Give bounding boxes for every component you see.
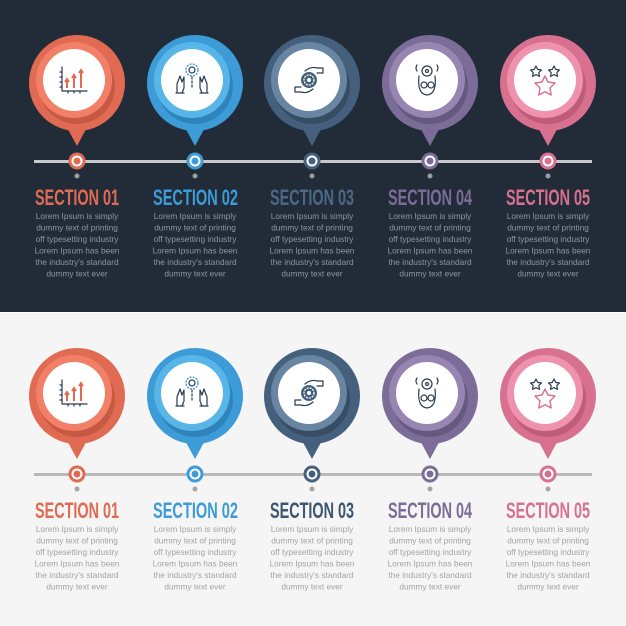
text 4 bottom: Lorem Ipsum has been bbox=[388, 558, 473, 568]
text 3 bottom: Lorem Ipsum has been bbox=[270, 558, 355, 568]
text 2 top: the industry's standard bbox=[153, 257, 237, 267]
text 2 bottom: off typesetting industry bbox=[154, 547, 237, 557]
text 2 top: Lorem Ipsum has been bbox=[153, 246, 238, 256]
text 2 top: Lorem Ipsum is simply bbox=[154, 211, 237, 221]
section 5 bottom bbox=[500, 348, 596, 592]
text 4 bottom: dummy text of printing bbox=[389, 536, 471, 546]
text 3 top: the industry's standard bbox=[270, 257, 354, 267]
text 5 top: Lorem Ipsum is simply bbox=[507, 211, 590, 221]
section 5 top bbox=[500, 35, 596, 278]
section 3 bottom bbox=[264, 348, 360, 592]
marker 2 top bbox=[186, 152, 204, 178]
text 2 top: dummy text of printing bbox=[154, 222, 236, 232]
pin 4 bottom bbox=[382, 348, 478, 459]
heading 1 top: SECTION 01 bbox=[35, 185, 119, 210]
pin 5 bottom bbox=[500, 348, 596, 459]
marker 1 top bbox=[68, 152, 86, 178]
icon: stars bbox=[530, 66, 560, 95]
text 5 top: Lorem Ipsum has been bbox=[506, 246, 591, 256]
marker 2 bottom bbox=[186, 466, 204, 492]
text 5 bottom bbox=[506, 524, 591, 592]
icon: stars bbox=[530, 379, 560, 408]
text 1 bottom: Lorem Ipsum has been bbox=[35, 558, 120, 568]
pin 2 top bbox=[147, 35, 243, 146]
text 1 bottom: the industry's standard bbox=[35, 570, 119, 580]
text 3 top bbox=[270, 211, 355, 278]
icon: hands with gear bbox=[295, 380, 323, 406]
text 4 top: dummy text of printing bbox=[389, 222, 471, 232]
text 1 bottom: off typesetting industry bbox=[36, 547, 119, 557]
text 5 bottom: Lorem Ipsum has been bbox=[506, 558, 591, 568]
text 5 bottom: off typesetting industry bbox=[507, 547, 590, 557]
text 3 top: Lorem Ipsum has been bbox=[270, 246, 355, 256]
text 2 bottom: Lorem Ipsum has been bbox=[153, 558, 238, 568]
text 4 bottom: Lorem Ipsum is simply bbox=[389, 524, 472, 534]
pin 1 top bbox=[29, 35, 125, 146]
text 2 top: off typesetting industry bbox=[154, 234, 237, 244]
text 2 top bbox=[153, 211, 238, 278]
text 4 top: the industry's standard bbox=[388, 257, 472, 267]
text 3 top: off typesetting industry bbox=[271, 234, 354, 244]
text 3 top: Lorem Ipsum is simply bbox=[271, 211, 354, 221]
icon: hands with idea gear bbox=[176, 64, 208, 93]
text 3 bottom: dummy text of printing bbox=[271, 536, 353, 546]
heading 4 top: SECTION 04 bbox=[388, 185, 472, 210]
marker 3 bottom bbox=[304, 466, 320, 492]
icon: bar chart bbox=[60, 67, 87, 93]
text 3 bottom: dummy text ever bbox=[281, 582, 343, 592]
text 1 top: the industry's standard bbox=[35, 257, 119, 267]
section 3 top bbox=[264, 35, 360, 278]
marker 5 bottom bbox=[540, 466, 556, 492]
text 2 bottom: the industry's standard bbox=[153, 570, 237, 580]
text 2 bottom bbox=[153, 524, 238, 592]
icon: hands with gear bbox=[295, 67, 323, 93]
text 4 top: Lorem Ipsum is simply bbox=[389, 211, 472, 221]
text 2 top: dummy text ever bbox=[164, 268, 226, 278]
text 5 top: dummy text of printing bbox=[507, 222, 589, 232]
pin 1 bottom bbox=[29, 348, 125, 459]
text 3 bottom bbox=[270, 524, 355, 592]
text 4 top bbox=[388, 211, 473, 278]
timeline bottom bbox=[34, 473, 592, 476]
text 2 bottom: Lorem Ipsum is simply bbox=[154, 524, 237, 534]
text 5 bottom: dummy text of printing bbox=[507, 536, 589, 546]
timeline top bbox=[34, 160, 592, 163]
text 1 top bbox=[35, 211, 120, 278]
heading 2 bottom: SECTION 02 bbox=[153, 498, 238, 523]
text 4 top: off typesetting industry bbox=[389, 234, 472, 244]
section 4 top bbox=[382, 35, 478, 278]
text 3 top: dummy text of printing bbox=[271, 222, 353, 232]
section 1 bottom bbox=[29, 348, 125, 592]
text 1 top: Lorem Ipsum is simply bbox=[36, 211, 119, 221]
icon: hands with idea gear bbox=[176, 377, 208, 406]
section 2 top bbox=[147, 35, 243, 278]
text 1 bottom bbox=[35, 524, 120, 592]
panel: light bottom bbox=[0, 313, 626, 626]
marker 4 bottom bbox=[422, 466, 438, 492]
text 5 bottom: the industry's standard bbox=[506, 570, 590, 580]
text 4 top: dummy text ever bbox=[399, 268, 461, 278]
text 5 top: off typesetting industry bbox=[507, 234, 590, 244]
section 1 top bbox=[29, 35, 125, 278]
text 3 bottom: the industry's standard bbox=[270, 570, 354, 580]
section 4 bottom bbox=[382, 348, 478, 592]
text 4 bottom: the industry's standard bbox=[388, 570, 472, 580]
heading 3 top: SECTION 03 bbox=[270, 185, 354, 210]
text 4 bottom: dummy text ever bbox=[399, 582, 461, 592]
marker 4 top bbox=[422, 152, 438, 178]
section 2 bottom bbox=[147, 348, 243, 592]
text 1 bottom: dummy text ever bbox=[46, 582, 108, 592]
text 4 bottom: off typesetting industry bbox=[389, 547, 472, 557]
text 2 bottom: dummy text of printing bbox=[154, 536, 236, 546]
marker 3 top bbox=[304, 152, 320, 178]
text 5 bottom: Lorem Ipsum is simply bbox=[507, 524, 590, 534]
text 5 bottom: dummy text ever bbox=[517, 582, 579, 592]
text 3 bottom: Lorem Ipsum is simply bbox=[271, 524, 354, 534]
heading 1 bottom: SECTION 01 bbox=[35, 498, 119, 523]
pin 3 top bbox=[264, 35, 360, 146]
marker 1 bottom bbox=[68, 466, 86, 492]
text 4 top: Lorem Ipsum has been bbox=[388, 246, 473, 256]
text 2 bottom: dummy text ever bbox=[164, 582, 226, 592]
pin 5 top bbox=[500, 35, 596, 146]
heading 3 bottom: SECTION 03 bbox=[270, 498, 354, 523]
panel: dark top bbox=[0, 0, 626, 312]
text 3 top: dummy text ever bbox=[281, 268, 343, 278]
text 1 top: dummy text ever bbox=[46, 268, 108, 278]
pin 3 bottom bbox=[264, 348, 360, 459]
text 1 top: Lorem Ipsum has been bbox=[35, 246, 120, 256]
text 5 top: the industry's standard bbox=[506, 257, 590, 267]
text 4 bottom bbox=[388, 524, 473, 592]
pin 2 bottom bbox=[147, 348, 243, 459]
icon: thinking head with gear bbox=[416, 378, 438, 408]
pin 4 top bbox=[382, 35, 478, 146]
icon: bar chart bbox=[60, 380, 87, 406]
text 1 bottom: Lorem Ipsum is simply bbox=[36, 524, 119, 534]
text 1 top: off typesetting industry bbox=[36, 234, 119, 244]
text 1 top: dummy text of printing bbox=[36, 222, 118, 232]
icon: thinking head with gear bbox=[416, 65, 438, 95]
text 5 top bbox=[506, 211, 591, 278]
heading 2 top: SECTION 02 bbox=[153, 185, 238, 210]
marker 5 top bbox=[540, 152, 556, 178]
text 3 bottom: off typesetting industry bbox=[271, 547, 354, 557]
heading 4 bottom: SECTION 04 bbox=[388, 498, 472, 523]
text 1 bottom: dummy text of printing bbox=[36, 536, 118, 546]
text 5 top: dummy text ever bbox=[517, 268, 579, 278]
